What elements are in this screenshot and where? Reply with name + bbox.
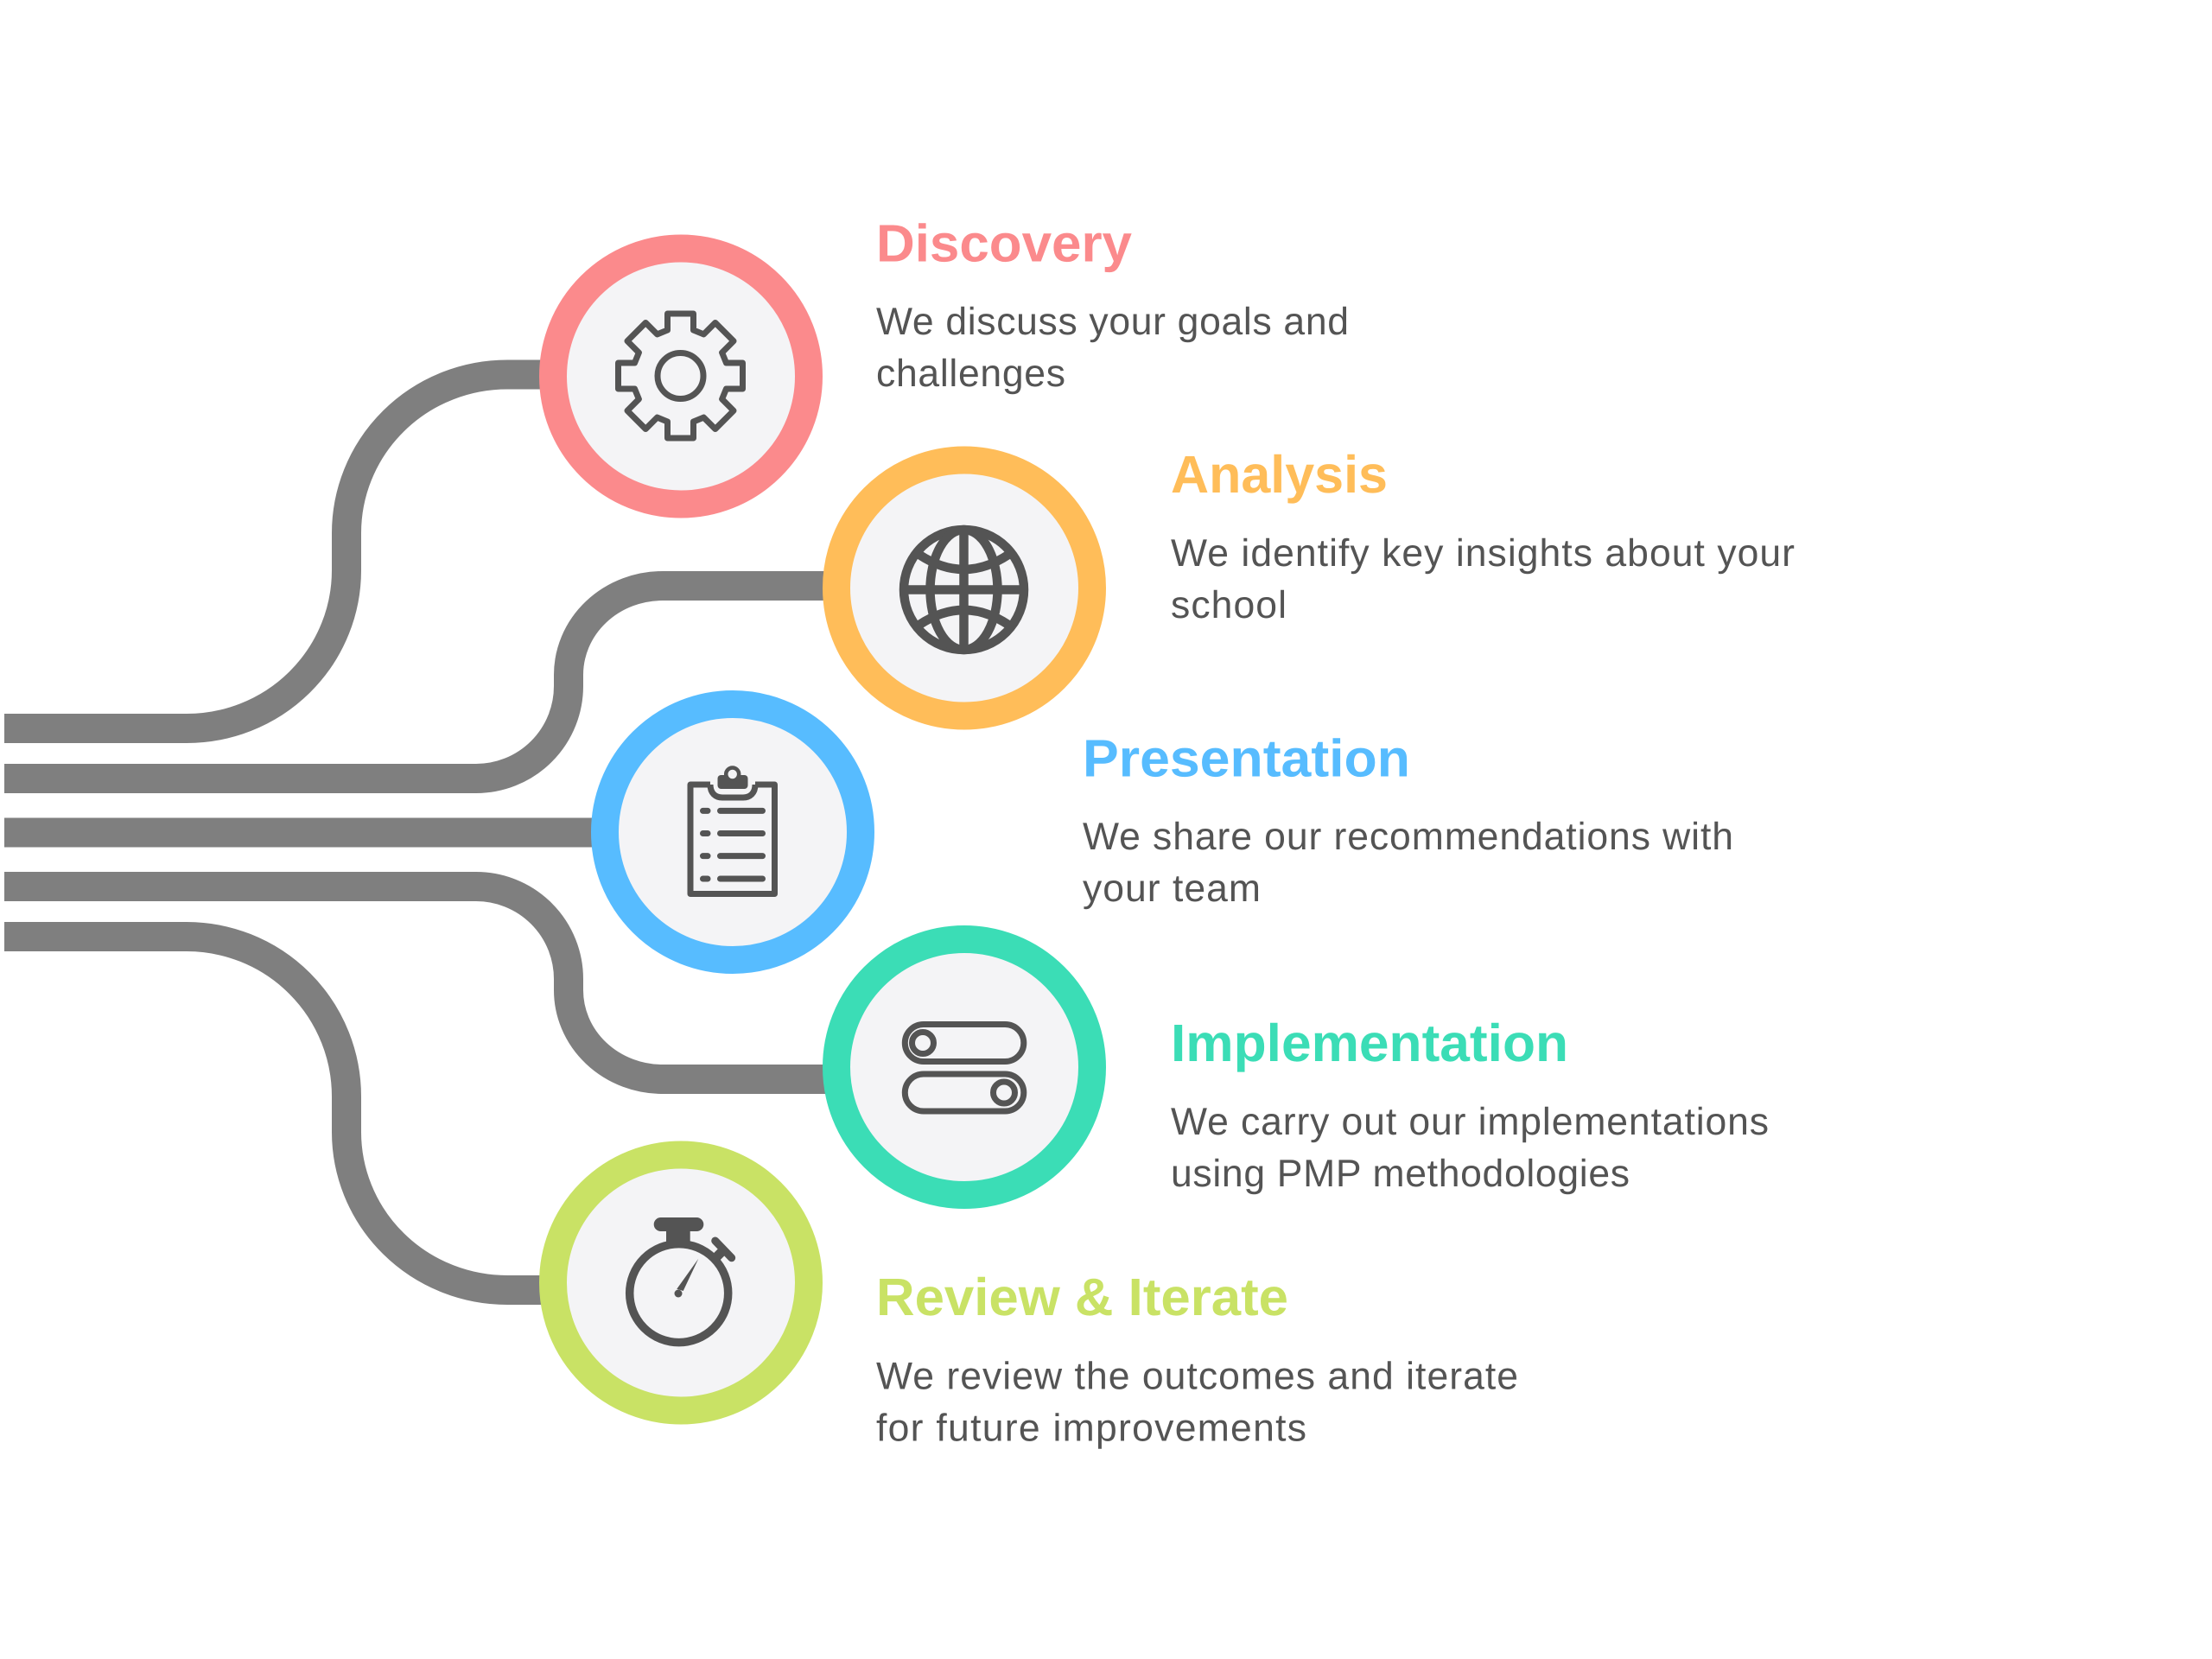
panel: implementation [836, 939, 1769, 1195]
line: to review [4, 937, 553, 1290]
discovery circle [553, 249, 809, 505]
review circle [553, 1154, 809, 1410]
review description: We review the outcomes and iterate [876, 1355, 1518, 1398]
line: to presentation [4, 817, 596, 847]
panel: discovery [553, 214, 1349, 505]
presentation description [1083, 816, 1733, 910]
implementation circle [836, 939, 1092, 1195]
presentation description: We share our recommendations with [1083, 816, 1733, 858]
review description: for future improvements [876, 1407, 1306, 1450]
discovery heading: Discovery [876, 214, 1132, 273]
connector lines [4, 374, 830, 1290]
icon: stopwatch [630, 1217, 732, 1343]
presentation heading: Presentation [1083, 729, 1410, 788]
icon: globe [904, 529, 1025, 650]
implementation description: We carry out our implementations [1171, 1101, 1769, 1143]
icon: clipboard [690, 767, 774, 893]
analysis description: school [1171, 584, 1287, 626]
review description [876, 1355, 1518, 1450]
presentation description: your team [1083, 868, 1261, 910]
implementation description: using PMP methodologies [1171, 1153, 1630, 1195]
discovery description [876, 301, 1349, 395]
analysis description [1171, 532, 1795, 626]
analysis heading: Analysis [1171, 445, 1388, 504]
icon: gear [619, 314, 743, 438]
presentation circle [605, 704, 861, 960]
discovery description: challenges [876, 353, 1065, 395]
review heading: Review & Iterate [876, 1268, 1288, 1326]
analysis description: We identify key insights about your [1171, 532, 1795, 575]
implementation description [1171, 1101, 1769, 1195]
discovery description: We discuss your goals and [876, 301, 1349, 343]
implementation heading: Implementation [1171, 1014, 1568, 1072]
line: to analysis [4, 586, 830, 779]
line: to discovery [4, 374, 553, 728]
panel: review and iterate [553, 1154, 1518, 1450]
panel: analysis [836, 445, 1795, 715]
panel: presentation [605, 704, 1733, 960]
icon: toggles [905, 1025, 1024, 1111]
line: to implementation [4, 887, 830, 1079]
analysis circle [836, 460, 1092, 715]
